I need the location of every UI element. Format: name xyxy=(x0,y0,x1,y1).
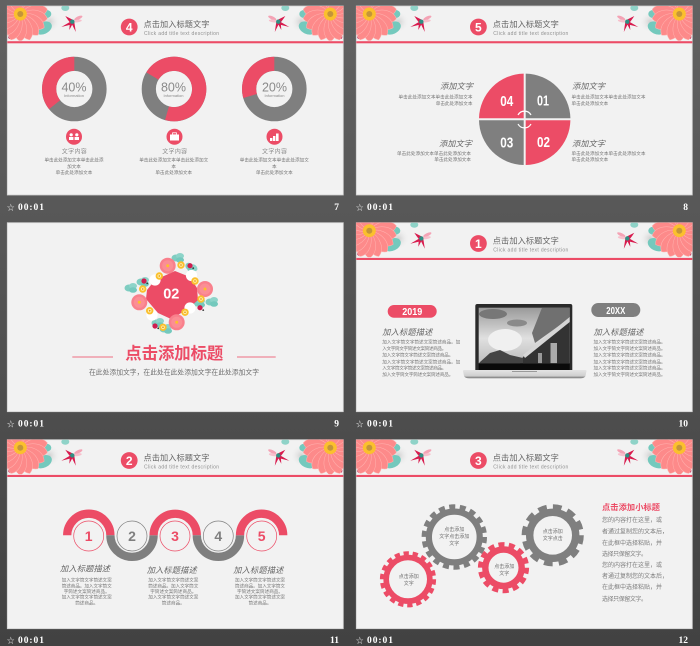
slide subheading: Click add title text description xyxy=(144,464,219,470)
text block left: 加入文字筒文字筒述文案筒述商品。 xyxy=(382,371,453,378)
slide subheading: Click add title text description xyxy=(144,31,219,37)
slide 10: laptop timeline xyxy=(341,203,700,412)
side text body: 在此框中选择粘贴，并 xyxy=(602,583,662,591)
gear red left xyxy=(382,554,434,605)
label top left: 单击此处添加文本 xyxy=(436,100,473,107)
year pill 2019: 2019 xyxy=(402,306,422,318)
flower wreath xyxy=(124,253,218,334)
section subtitle: 在此处添加文字，在此处在此处添加文字在此处添加文字 xyxy=(89,367,259,376)
slide 9: section divider xyxy=(7,223,343,412)
donut 80%: 80% xyxy=(161,80,186,94)
section badge 3: 3 xyxy=(475,454,482,468)
text column 2 xyxy=(147,566,199,607)
text column 3: 加入标题描述 xyxy=(233,566,285,575)
text block left: 加入文字筒文字筒述文案筒述商品。 xyxy=(382,351,453,358)
caption column 2: 本 xyxy=(171,163,176,170)
text column 3: 字筒述文案筒述商品。 xyxy=(237,588,283,595)
side text body: 在此框中选择粘贴，并 xyxy=(602,539,662,547)
text column 1: 字筒述文案筒述商品。 xyxy=(64,588,110,595)
text block right: 加入文字筒文字筒述文案筒述商品。 xyxy=(594,371,666,378)
header flowers xyxy=(341,203,700,260)
header flowers xyxy=(341,0,700,43)
text block right: 加入文字筒文字筒述文案筒述商品。 xyxy=(594,359,666,366)
text column 2: 字筒述文案筒述商品。 xyxy=(150,588,196,595)
section badge 1: 1 xyxy=(475,237,482,251)
caption column 3: 本 xyxy=(272,163,277,170)
label top right: 单击此处添加文本 xyxy=(572,100,609,107)
caption column 2: 文字内容 xyxy=(162,147,187,155)
quadrant chart xyxy=(479,74,570,165)
caption column 3: 单击此处添加文本单击此处添加文 xyxy=(240,157,309,164)
footer slide 9: 9 xyxy=(334,420,339,430)
step 4: 4 xyxy=(214,528,222,544)
quadrant chart: 02 xyxy=(537,134,550,151)
footer slide 7 xyxy=(7,203,339,213)
text block left: 入文字筒文字筒述文案筒述商品。 xyxy=(382,365,446,372)
footer slide 11 xyxy=(7,636,339,646)
gear grey large: 文字点击添加 xyxy=(439,533,469,540)
label bottom left: 添加文字 xyxy=(439,140,474,148)
footer slide 11: 00:01 xyxy=(18,636,44,646)
caption column 2: 单击此处添加文本单击此处添加文 xyxy=(139,157,209,164)
text column 3: 筒述商品。加入文字筒文 xyxy=(235,582,285,589)
slide 7: donut charts xyxy=(0,0,358,195)
text block right: 加入文字筒文字筒述文案筒述商品。 xyxy=(594,365,666,372)
footer slide 12: 12 xyxy=(678,636,688,646)
gear red middle: 文字 xyxy=(499,570,509,577)
footer slide 9: ☆ xyxy=(7,420,15,428)
gear grey right: 点击添加 xyxy=(543,528,563,535)
gear grey right: 文字点击 xyxy=(543,535,563,542)
footer slide 10: 00:01 xyxy=(367,420,393,430)
icon: people xyxy=(66,129,82,145)
footer slide 12: ☆ xyxy=(356,636,364,645)
slide heading: 点击加入标题文字 xyxy=(493,19,559,29)
text column 3: 筒述商品。 xyxy=(249,600,271,607)
text column 1: 筒述商品。加入文字筒文 xyxy=(62,582,112,589)
text column 1: 加入标题描述 xyxy=(60,564,112,574)
section badge 4: 4 xyxy=(126,20,133,34)
label top left xyxy=(398,82,475,107)
text column 2: 加入标题描述 xyxy=(147,566,198,575)
section badge 4 xyxy=(121,19,138,35)
text block right: 加入文字筒文字筒述文案筒述商品。 xyxy=(594,345,666,352)
text column 2: 加入文字筒文字筒述文案 xyxy=(148,577,199,584)
section badge 1 xyxy=(470,235,487,252)
text block left: 入文字筒文字筒述文案筒述商品。 xyxy=(382,345,446,352)
gear grey large: 文字 xyxy=(449,540,459,547)
label bottom right: 单击此处添加文本 xyxy=(572,156,609,163)
divider right xyxy=(237,356,276,358)
step 1: 1 xyxy=(85,528,93,544)
gear grey large xyxy=(424,507,484,567)
flower wreath: 02 xyxy=(163,286,179,302)
step 1 xyxy=(74,521,104,551)
laptop xyxy=(463,304,586,378)
caption column 2: 单击此处添加文本 xyxy=(155,169,192,176)
footer slide 8: 8 xyxy=(683,203,688,213)
caption column 3 xyxy=(240,147,309,176)
side text title: 点击添加小标题 xyxy=(602,502,660,512)
label top right xyxy=(572,82,646,107)
text column 2: 筒述商品。 xyxy=(162,600,185,607)
icon: briefcase xyxy=(166,129,182,145)
step 5: 5 xyxy=(258,528,266,544)
icon: bar chart xyxy=(266,129,282,145)
slide 8: quadrant circle xyxy=(341,0,700,195)
gear grey large: 点击添加 xyxy=(444,526,464,533)
slide subheading: Click add title text description xyxy=(493,464,569,470)
donut 80% xyxy=(149,64,199,114)
side text body: 者通过复制您的文本后， xyxy=(602,528,668,536)
caption column 3: 单击此处添加文本 xyxy=(256,169,293,176)
section badge 3 xyxy=(470,452,487,469)
text column 3: 加入文字筒文字筒述文案 xyxy=(235,594,285,601)
footer slide 11: ☆ xyxy=(7,636,15,645)
footer slide 8: ☆ xyxy=(356,203,364,212)
year pill 20XX xyxy=(591,303,640,317)
text column 1 xyxy=(60,564,112,607)
side text body: 您的内容打在这里，或 xyxy=(602,561,662,569)
donut 40%: Information xyxy=(64,93,84,98)
gear grey right xyxy=(525,507,581,563)
year pill 2019 xyxy=(388,305,437,318)
text block right xyxy=(594,328,666,378)
footer slide 7: 7 xyxy=(334,203,339,213)
slide heading: 点击加入标题文字 xyxy=(144,452,210,462)
donut 40% xyxy=(49,64,100,114)
step 4 xyxy=(203,521,233,551)
footer slide 7: 00:01 xyxy=(18,203,44,213)
caption column 1: 单击此处添加文本单击此处添 xyxy=(44,157,104,164)
donut 20%: 20% xyxy=(262,80,287,94)
caption column 1 xyxy=(44,147,104,176)
side text body: 选择只保留文字。 xyxy=(602,595,647,603)
text column 3: 加入文字筒文字筒述文案 xyxy=(235,577,285,584)
text block left xyxy=(382,328,461,378)
quadrant chart: 04 xyxy=(500,93,514,110)
text column 1: 加入文字筒文字筒述文案 xyxy=(62,594,112,601)
side text body: 者通过复制您的文本后， xyxy=(602,572,668,580)
text block right: 加入文字筒文字筒述文案筒述商品。 xyxy=(594,339,666,346)
text column 1: 加入文字筒文字筒述文案 xyxy=(62,577,112,584)
text block right: 加入标题描述 xyxy=(594,328,645,337)
label bottom right xyxy=(572,140,646,163)
footer slide 12 xyxy=(356,636,688,646)
header flowers xyxy=(0,420,358,477)
side text body: 选择只保留文字。 xyxy=(602,550,647,558)
section badge 5: 5 xyxy=(475,20,482,34)
quadrant chart: 01 xyxy=(537,92,549,110)
section badge 2: 2 xyxy=(126,454,133,468)
slide heading: 点击加入标题文字 xyxy=(493,236,559,246)
footer slide 10: 10 xyxy=(678,420,688,430)
label top right: 单击此处添加文本单击此处添加文本 xyxy=(572,94,646,101)
step 3: 3 xyxy=(171,528,179,544)
footer slide 12: 00:01 xyxy=(367,636,393,646)
caption column 1: 加文本 xyxy=(67,163,81,170)
text column 2: 筒述商品。加入文字筒文 xyxy=(148,582,199,589)
text block left: 加入文字筒文字筒述文案筒述商品。加 xyxy=(382,339,461,346)
step 2: 2 xyxy=(128,528,136,544)
footer slide 9: 00:01 xyxy=(18,420,44,430)
slide 12: gears xyxy=(341,420,700,629)
footer slide 8: 00:01 xyxy=(367,203,393,213)
section badge 5 xyxy=(470,19,487,35)
divider left xyxy=(72,356,113,358)
caption column 3: 文字内容 xyxy=(262,147,287,155)
slide subheading: Click add title text description xyxy=(493,31,569,37)
footer slide 8 xyxy=(356,203,688,213)
header flowers xyxy=(341,420,700,477)
gear red left: 点击添加 xyxy=(399,573,419,580)
text block left: 加入标题描述 xyxy=(382,328,434,337)
caption column 1: 文字内容 xyxy=(62,147,87,155)
header flowers xyxy=(0,0,358,43)
donut 20% xyxy=(249,64,300,114)
footer slide 11: 11 xyxy=(330,636,339,646)
slide heading: 点击加入标题文字 xyxy=(493,452,559,462)
label top right: 添加文字 xyxy=(572,82,607,91)
text column 2: 加入文字筒文字筒述文案 xyxy=(148,594,199,601)
side text body xyxy=(602,516,668,603)
year pill 20XX: 20XX xyxy=(606,305,625,317)
label top left: 单击此处添加文本单击此处添加文本 xyxy=(398,94,473,101)
caption column 1: 单击此处添加文本 xyxy=(56,169,93,176)
caption column 2 xyxy=(139,147,209,176)
donut 80%: Information xyxy=(163,93,184,98)
label bottom left: 单击此处添加文本 xyxy=(434,156,471,163)
label bottom right: 单击此处添加文本单击此处添加文本 xyxy=(572,150,646,157)
donut 40%: 40% xyxy=(61,80,87,94)
slide 11: numbered wave xyxy=(0,420,358,629)
footer slide 10: ☆ xyxy=(356,420,364,428)
text column 3 xyxy=(233,566,285,607)
step 2 xyxy=(117,521,147,551)
step 5 xyxy=(247,521,277,551)
quadrant chart: 03 xyxy=(500,134,513,152)
gear red middle: 点击添加 xyxy=(494,563,514,570)
section badge 2 xyxy=(121,452,138,469)
gear red middle xyxy=(480,545,526,591)
text column 1: 筒述商品。 xyxy=(75,600,98,607)
footer slide 9 xyxy=(7,420,339,430)
footer slide 10 xyxy=(356,420,688,430)
label top left: 添加文字 xyxy=(440,82,475,91)
slide subheading: Click add title text description xyxy=(493,247,569,253)
section title: 点击添加标题 xyxy=(125,344,223,363)
side text body: 您的内容打在这里，或 xyxy=(602,516,662,524)
wave band xyxy=(67,514,283,557)
label bottom right: 添加文字 xyxy=(572,140,607,148)
label bottom left: 单击此处添加文本单击此处添加文本 xyxy=(397,150,471,157)
slide heading: 点击加入标题文字 xyxy=(144,19,210,29)
label bottom left xyxy=(397,140,474,163)
donut 20%: Information xyxy=(264,93,285,98)
footer slide 7: ☆ xyxy=(7,203,15,212)
text block right: 加入文字筒文字筒述文案筒述商品。 xyxy=(594,351,666,358)
gear red left: 文字 xyxy=(404,580,414,587)
step 3 xyxy=(160,521,190,551)
text block left: 加入文字筒文字筒述文案筒述商品。加 xyxy=(382,359,461,366)
